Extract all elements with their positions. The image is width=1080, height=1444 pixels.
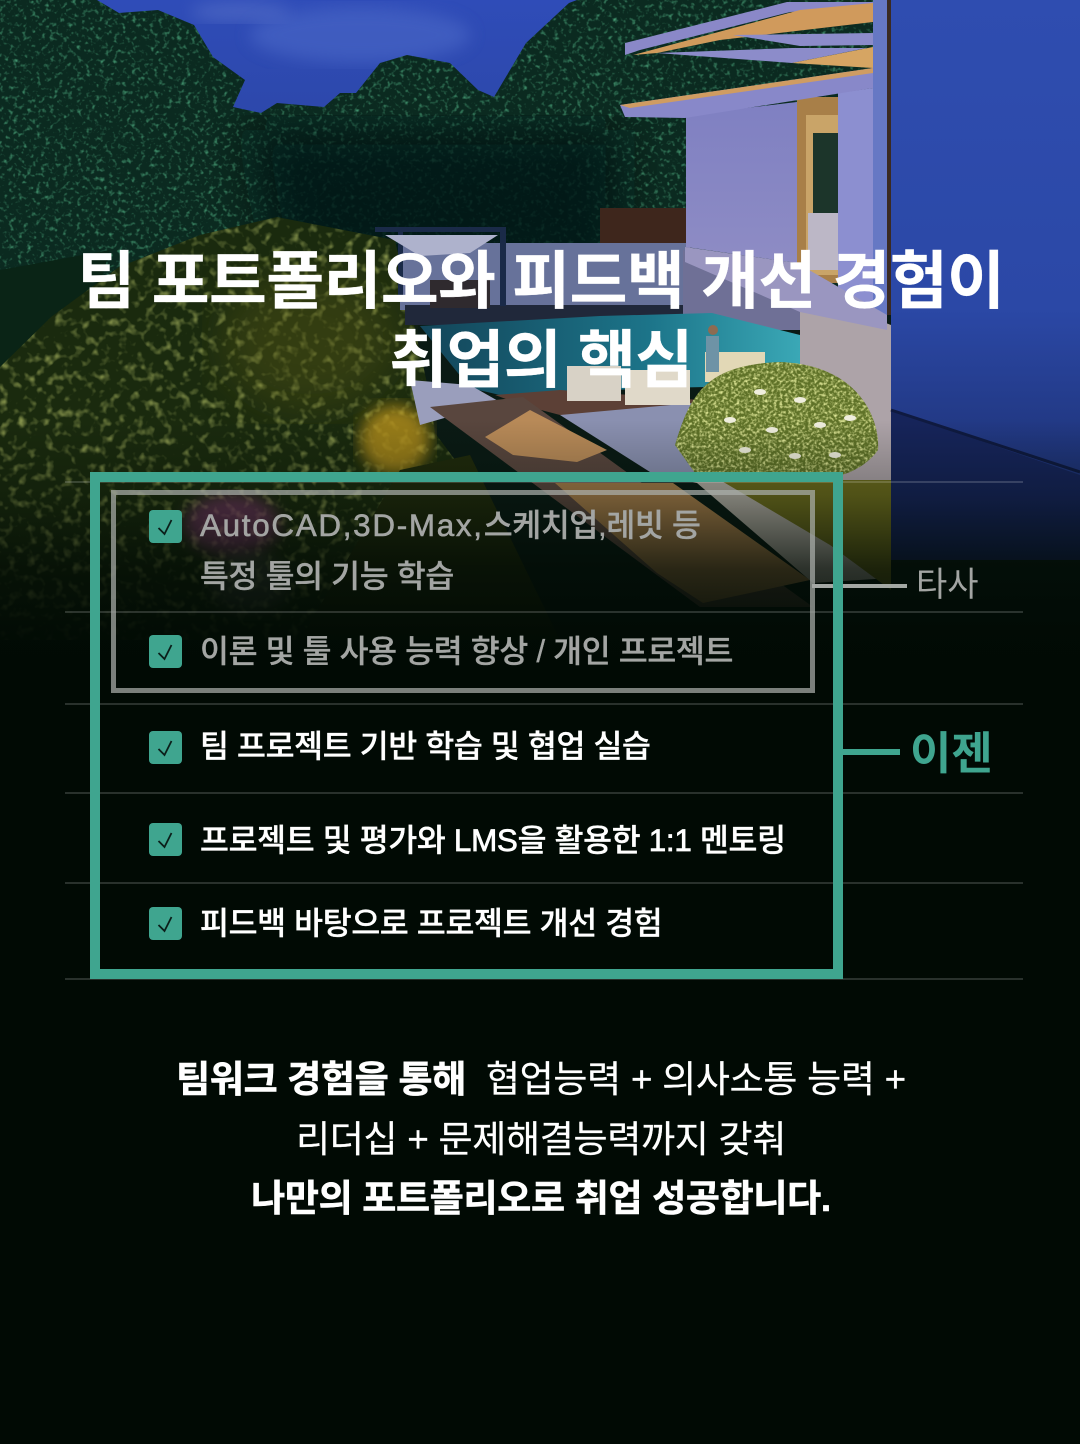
person by pool <box>706 325 719 372</box>
green current box <box>90 472 843 979</box>
checkbox 1 <box>149 510 182 543</box>
connector: competitors <box>812 584 907 588</box>
item 4 text: 프로젝트 및 평가와 LMS을 활용한 1:1 멘토링 <box>200 823 786 858</box>
background photo: night house and garden <box>0 0 1080 630</box>
gray competitor box <box>111 490 815 693</box>
item 1 text <box>200 508 701 594</box>
title: 팀 포트폴리오와 피드백 개선 경험이 <box>78 247 1004 317</box>
closing message: 나만의 포트폴리오로 취업 성공합니다. <box>251 1178 831 1219</box>
closing message: 리더십 + 문제해결능력까지 갖춰 <box>296 1118 786 1160</box>
house walls <box>685 0 1080 560</box>
outdoor sofas <box>567 352 765 405</box>
lower garden foliage <box>0 217 516 624</box>
terrace floor <box>410 380 890 607</box>
item 3 text: 팀 프로젝트 기반 학습 및 협업 실습 <box>200 729 651 764</box>
label: competitors: 타사 <box>916 566 979 604</box>
lower right wall <box>800 310 891 540</box>
night sky <box>80 0 600 140</box>
connector: now <box>840 749 900 755</box>
trees <box>0 0 875 300</box>
flowering shrub <box>675 362 878 474</box>
table row dividers <box>65 481 1023 980</box>
lower-left dark bush <box>0 250 110 440</box>
checkbox 5 <box>149 907 182 940</box>
item 5 text: 피드백 바탕으로 프로젝트 개선 경험 <box>200 906 662 941</box>
title: 취업의 핵심 <box>389 326 693 396</box>
title <box>78 247 1004 396</box>
right garden bed <box>720 480 891 590</box>
closing message: 팀워크 경험을 통해 협업능력 + 의사소통 능력 + <box>176 1059 906 1100</box>
checkbox 3 <box>149 731 182 764</box>
closing message <box>176 1059 906 1219</box>
swimming pool <box>420 313 800 395</box>
pergola in garden <box>375 227 506 308</box>
checkbox 2 <box>149 635 182 668</box>
pergola roof <box>620 2 873 118</box>
item 1 text: 특정 툴의 기능 학습 <box>200 559 454 594</box>
terrace back wall and deck <box>400 243 800 330</box>
label: now: 이젠 <box>910 728 993 779</box>
item 1 text: AutoCAD,3D-Max,스케치업,레빗 등 <box>200 508 701 543</box>
checkbox 4 <box>149 823 182 856</box>
item 2 text: 이론 및 툴 사용 능력 향상 / 개인 프로젝트 <box>200 634 733 669</box>
